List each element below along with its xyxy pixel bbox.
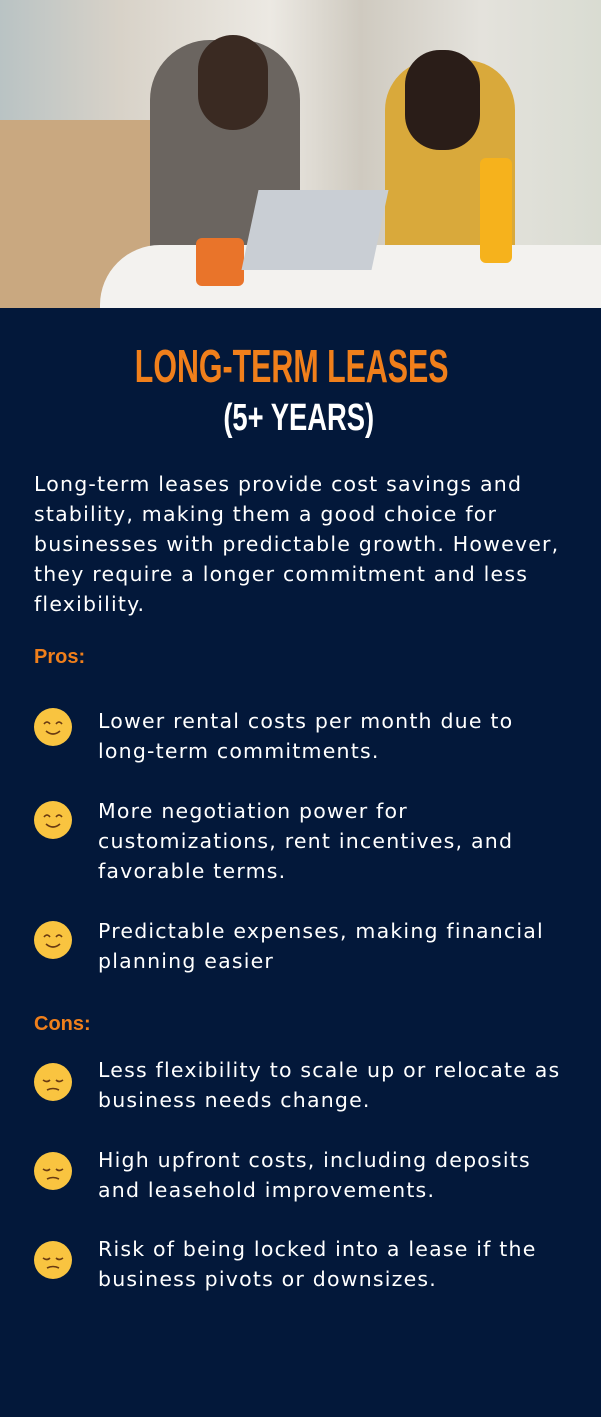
intro text: stability, making them a good choice for — [34, 502, 497, 526]
con 2: and leasehold improvements. — [98, 1178, 435, 1202]
pro 2: favorable terms. — [98, 859, 286, 883]
con 1: business needs change. — [98, 1088, 371, 1112]
title: LONG-TERM LEASES — [135, 340, 448, 392]
pro 1: Lower rental costs per month due to — [98, 709, 513, 733]
icon: smile — [34, 801, 72, 839]
pro 2 — [98, 799, 513, 883]
intro text — [34, 472, 559, 616]
pro 1: long-term commitments. — [98, 739, 380, 763]
photo: coworking scene — [0, 0, 601, 308]
pros list — [34, 708, 544, 973]
con 2 — [98, 1148, 531, 1202]
intro text: businesses with predictable growth. However, — [34, 532, 559, 556]
con 2: High upfront costs, including deposits — [98, 1148, 531, 1172]
intro text: they require a longer commitment and less — [34, 562, 528, 586]
heading: pros: Pros: — [34, 646, 85, 668]
pro 3: planning easier — [98, 949, 274, 973]
pro 2: More negotiation power for — [98, 799, 408, 823]
con 1: Less flexibility to scale up or relocate as — [98, 1058, 560, 1082]
pro 3: Predictable expenses, making financial — [98, 919, 544, 943]
con 1 — [98, 1058, 560, 1112]
icon: pensive — [34, 1241, 72, 1279]
heading: cons: Cons: — [34, 1013, 91, 1035]
pro 2: customizations, rent incentives, and — [98, 829, 513, 853]
con 3: Risk of being locked into a lease if the — [98, 1237, 537, 1261]
cons list — [34, 1058, 560, 1291]
intro text: flexibility. — [34, 592, 145, 616]
subtitle: (5+ YEARS) — [223, 397, 374, 439]
pro 3 — [98, 919, 544, 973]
con 3 — [98, 1237, 537, 1291]
icon: smile — [34, 708, 72, 746]
icon: pensive — [34, 1152, 72, 1190]
con 3: business pivots or downsizes. — [98, 1267, 437, 1291]
icon: smile — [34, 921, 72, 959]
intro text: Long-term leases provide cost savings and — [34, 472, 522, 496]
pro 1 — [98, 709, 513, 763]
icon: pensive — [34, 1063, 72, 1101]
